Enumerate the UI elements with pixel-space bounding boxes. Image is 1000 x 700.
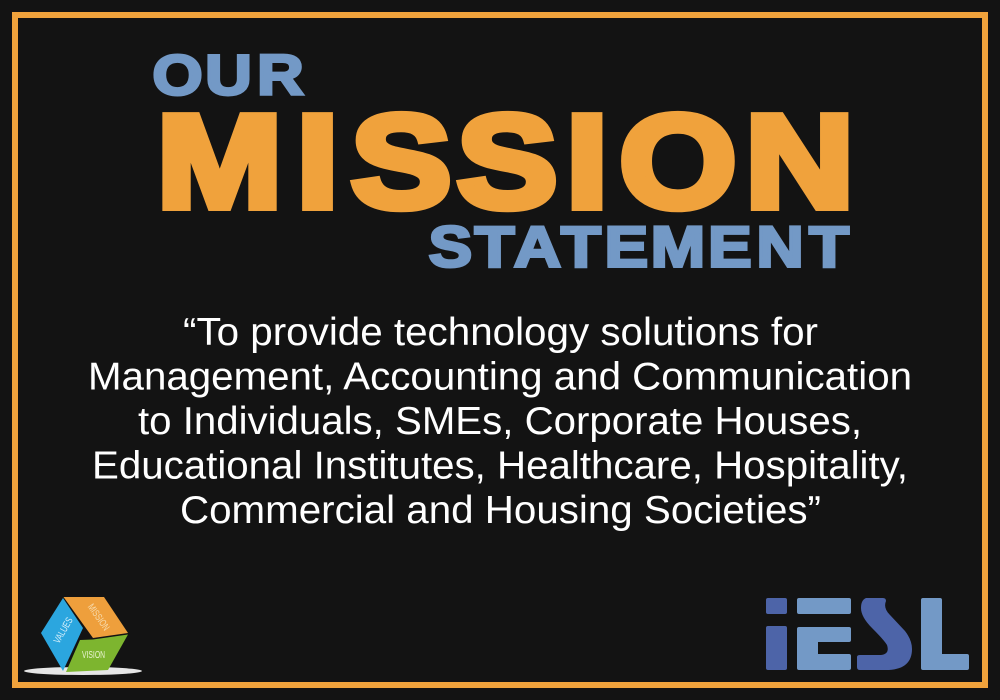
logo label: mission: MISSION: [85, 602, 111, 633]
letter E: [797, 598, 851, 670]
heading: MISSION: MISSION: [157, 88, 854, 235]
text block: mission quote: “To provide technology solutions for: [183, 311, 818, 354]
icon: IESL logo: [766, 598, 969, 670]
letter L: [921, 598, 969, 670]
logo label: values: VALUES: [52, 616, 76, 646]
letter S: [857, 598, 912, 670]
text block: mission quote: [88, 311, 912, 532]
logo label: vision: VISION: [82, 650, 105, 661]
text block: mission quote: Commercial and Housing Societies”: [180, 489, 821, 532]
text block: mission quote: Educational Institutes, Healthcare, Hospitality,: [92, 444, 908, 488]
text block: mission quote: Management, Accounting and Communication: [88, 356, 912, 398]
icon: values mission vision logo: [24, 597, 142, 675]
logo segment: mission: [64, 597, 128, 638]
logo segment: vision: [66, 634, 128, 672]
logo base ellipse: [24, 667, 142, 675]
text block: mission quote: to Individuals, SMEs, Corporate Houses,: [138, 400, 862, 443]
heading: STATEMENT: STATEMENT: [429, 215, 849, 280]
letter i: [766, 598, 787, 670]
logo segment: values: [41, 598, 83, 671]
heading: OUR: OUR: [153, 43, 304, 107]
